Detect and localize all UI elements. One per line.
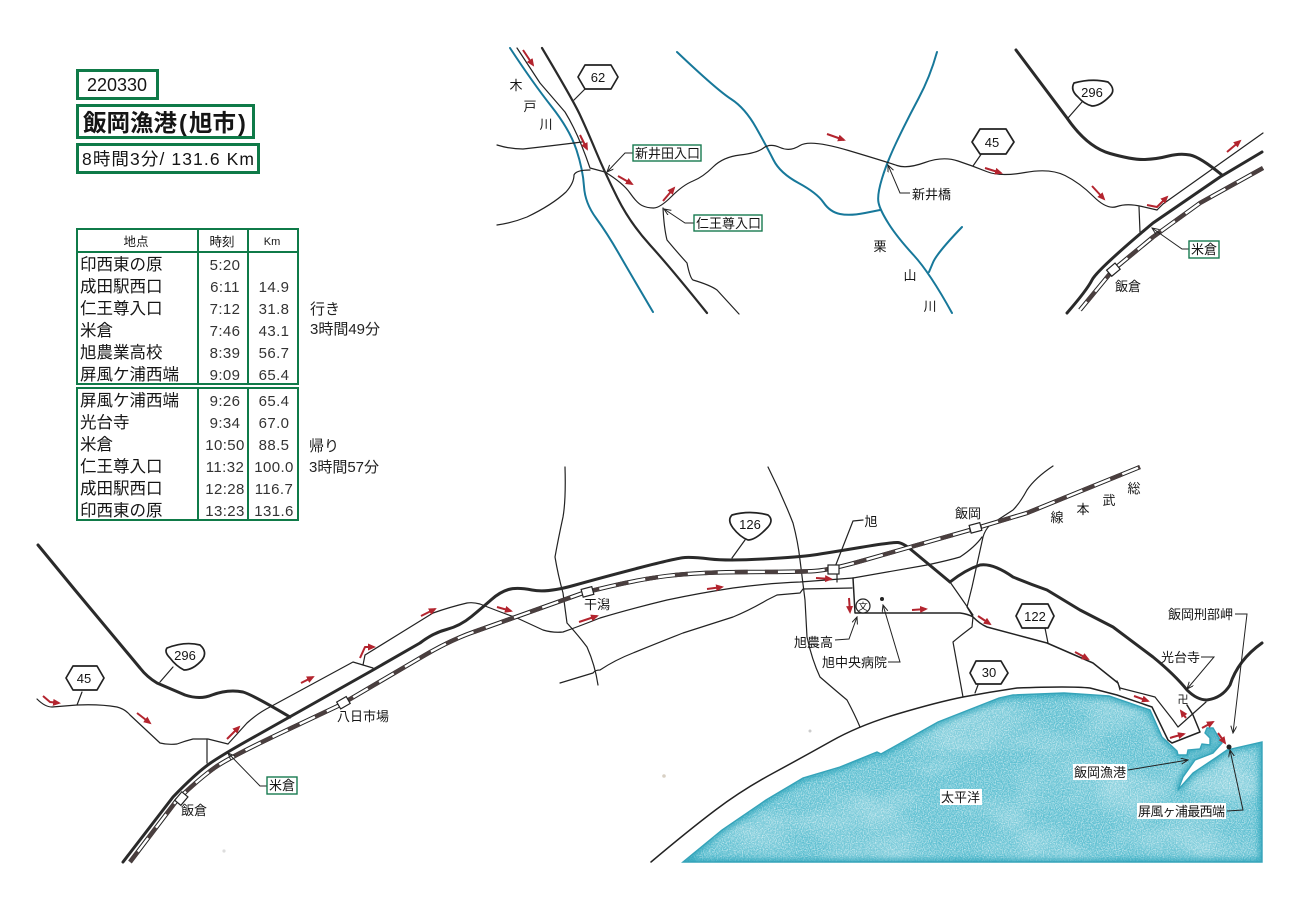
row: 屏風ケ浦西端 outbound: 9:09 (210, 367, 240, 384)
row: 米倉 outbound: 7:46 (210, 323, 240, 340)
route 296 road (1016, 50, 1222, 175)
row: 印西東の原 return: 13:23 (205, 503, 245, 520)
route 296 road (38, 545, 290, 717)
label: 飯岡刑部岬: 飯岡刑部岬 (1168, 607, 1233, 622)
panel: lower map (37, 466, 1262, 862)
road sign: 45: 45 (77, 671, 91, 686)
note: return duration (309, 437, 379, 476)
row: 成田駅西口 return (80, 479, 293, 498)
label: 総武本線 (1050, 481, 1141, 525)
heading: 飯岡漁港(旭市) (78, 106, 254, 138)
row: 仁王尊入口 outbound (80, 299, 289, 318)
note: return duration: 帰り (309, 437, 339, 455)
table header row: 時刻 (209, 235, 235, 249)
label: 新井橋: 新井橋 (912, 187, 951, 202)
row: 米倉 return (80, 435, 289, 454)
label: 総武本線: 総 (1127, 481, 1141, 496)
station: 飯倉 (175, 792, 207, 818)
row: 光台寺: 67.0 (259, 415, 289, 432)
label: 飯岡刑部岬 (1168, 607, 1247, 733)
label: 光台寺 (1161, 650, 1214, 689)
row: 成田駅西口 return: 116.7 (255, 481, 293, 498)
road sign: 30 (970, 661, 1008, 693)
row: 屏風ケ浦西端 outbound: 屏風ケ浦西端 (80, 365, 179, 384)
road sign: 122: 122 (1024, 609, 1046, 624)
row: 仁王尊入口 return: 仁王尊入口 (80, 457, 162, 476)
row: 屏風ケ浦西端 outbound: 65.4 (259, 367, 289, 384)
duration and distance box (78, 144, 258, 172)
row: 仁王尊入口 return (80, 457, 294, 476)
rivers (510, 48, 962, 313)
route arrows (43, 578, 1225, 743)
route arrows (523, 50, 1240, 207)
row: 印西東の原 outbound: 印西東の原 (80, 255, 162, 274)
row: 成田駅西口 return: 12:28 (205, 481, 245, 498)
label: 木戸川 (509, 78, 553, 132)
local roads (497, 48, 1263, 314)
note: outbound duration (310, 301, 380, 338)
panel: time table (77, 229, 380, 520)
label: 栗山川: 川 (923, 299, 937, 314)
note: return duration: 3時間57分 (309, 459, 379, 476)
icon: temple mark: 卍 (1178, 693, 1188, 706)
row: 米倉 outbound: 米倉 (80, 321, 113, 340)
label: 飯岡漁港: 飯岡漁港 (1074, 765, 1126, 780)
row: 仁王尊入口 return: 11:32 (206, 459, 244, 476)
road sign: 126 (730, 512, 771, 558)
road sign: 296: 296 (1081, 85, 1103, 100)
label: 栗山川: 栗 (873, 239, 887, 254)
row: 屏風ケ浦西端 outbound (80, 365, 289, 384)
railway (1080, 168, 1263, 310)
icon: school symbol 文 (856, 599, 870, 613)
road sign: 296 (1068, 80, 1113, 118)
road sign: 296 (160, 644, 205, 682)
row: 米倉 outbound: 43.1 (259, 323, 289, 340)
label: 栗山川: 山 (903, 268, 917, 283)
label: 新井田入口 (607, 145, 701, 172)
row: 屏風ケ浦西端 return (80, 391, 289, 410)
station: 八日市場: 八日市場 (337, 709, 389, 724)
label: 総武本線: 本 (1076, 502, 1090, 517)
row: 成田駅西口 outbound: 14.9 (259, 279, 289, 296)
label: 仁王尊入口: 仁王尊入口 (696, 216, 761, 231)
row: 光台寺: 9:34 (210, 415, 240, 432)
label: 木戸川: 木 (509, 78, 523, 93)
station: 飯岡: 飯岡 (955, 506, 981, 521)
road sign: 122 (1016, 604, 1054, 643)
row: 米倉 outbound (80, 321, 289, 340)
label: 新井橋 (888, 165, 951, 202)
station: 旭 (828, 514, 878, 574)
station: 八日市場 (337, 697, 389, 724)
Sobu main line railway (130, 467, 1140, 862)
row: 仁王尊入口 return: 100.0 (254, 459, 294, 476)
label: 米倉 (1152, 228, 1219, 258)
table header row: Km (264, 236, 280, 248)
heading: 飯岡漁港(旭市): ) (238, 110, 246, 136)
road sign: 126: 126 (739, 517, 761, 532)
table header row: 地点 (123, 235, 149, 249)
label: 木戸川: 戸 (523, 99, 537, 114)
row: 印西東の原 outbound: 5:20 (210, 257, 240, 274)
label: 総武本線: 武 (1102, 493, 1116, 508)
row: 旭農業高校 (80, 343, 289, 362)
route 62 road (542, 48, 707, 313)
label: 屏風ヶ浦最西端 (1137, 744, 1243, 819)
row: 屏風ケ浦西端 return: 9:26 (210, 393, 240, 410)
label: 仁王尊入口 (664, 209, 762, 231)
road sign: 45: 45 (985, 135, 999, 150)
date box (78, 70, 158, 98)
route 126 road (1067, 152, 1262, 313)
station: 飯倉: 飯倉 (181, 803, 207, 818)
label: 木戸川: 川 (539, 117, 553, 132)
heading: 飯岡漁港(旭市): ( (179, 110, 187, 136)
road sign: 45 (66, 666, 104, 705)
duration and distance box: 8時間3分/ 131.6 Km (82, 149, 254, 169)
row: 印西東の原 return: 131.6 (254, 503, 294, 520)
label: 旭中央病院 (822, 605, 900, 670)
row: 印西東の原 return (80, 501, 294, 520)
station: 干潟: 干潟 (584, 597, 610, 612)
label: 米倉 (228, 753, 297, 794)
row: 旭農業高校: 8:39 (210, 345, 240, 362)
row: 仁王尊入口 outbound: 仁王尊入口 (80, 299, 162, 318)
road sign: 45 (972, 129, 1014, 166)
row: 米倉 return: 10:50 (205, 437, 245, 454)
row: 旭農業高校: 旭農業高校 (80, 343, 162, 362)
label: 総武本線: 線 (1050, 510, 1064, 525)
row: 印西東の原 return: 印西東の原 (80, 501, 162, 520)
note: outbound duration: 行き (310, 301, 340, 318)
table header row (123, 235, 280, 249)
row: 旭農業高校: 56.7 (259, 345, 289, 362)
heading: 飯岡漁港(旭市): 飯岡漁港 (83, 110, 177, 136)
label: 米倉: 米倉 (269, 778, 295, 793)
panel: Pacific Ocean (670, 685, 1270, 865)
row: 印西東の原 outbound (80, 255, 240, 274)
row: 成田駅西口 outbound (80, 277, 289, 296)
road sign: 296: 296 (174, 648, 196, 663)
label: 太平洋: 太平洋 (941, 790, 980, 805)
station: 飯岡 (955, 506, 982, 533)
icon: hospital dot (880, 597, 884, 601)
panel: title block (78, 70, 258, 172)
row: 屏風ケ浦西端 return: 屏風ケ浦西端 (80, 391, 179, 410)
row: 成田駅西口 outbound: 6:11 (210, 279, 240, 296)
station: 干潟 (581, 587, 610, 612)
road sign: 30: 30 (982, 665, 996, 680)
label: 旭農高: 旭農高 (794, 635, 833, 650)
row: 成田駅西口 outbound: 成田駅西口 (80, 277, 162, 296)
label: 屏風ヶ浦最西端: 屏風ヶ浦最西端 (1138, 804, 1225, 819)
row: 屏風ケ浦西端 return: 65.4 (259, 393, 289, 410)
route 122 road (950, 565, 1262, 700)
date box: 220330 (87, 75, 147, 95)
row: 米倉 return: 88.5 (259, 437, 289, 454)
label: 新井田入口: 新井田入口 (635, 146, 700, 161)
panel: upper map (497, 48, 1263, 314)
route 126 road (123, 542, 950, 862)
icon: school symbol 文: 文 (858, 601, 868, 613)
note: outbound duration: 3時間49分 (310, 321, 380, 338)
row: 光台寺: 光台寺 (80, 413, 130, 432)
label: 光台寺: 光台寺 (1161, 650, 1200, 665)
label: 旭農高 (794, 617, 857, 650)
row: 成田駅西口 return: 成田駅西口 (80, 479, 162, 498)
row: 仁王尊入口 outbound: 31.8 (259, 301, 289, 318)
road sign: 62: 62 (591, 70, 605, 85)
row: 米倉 return: 米倉 (80, 435, 113, 454)
label: 米倉: 米倉 (1191, 242, 1217, 257)
row: 光台寺 (80, 413, 289, 432)
label: 栗山川 (873, 239, 937, 314)
row: 仁王尊入口 outbound: 7:12 (210, 301, 240, 318)
station: 旭: 旭 (864, 514, 878, 529)
label: 旭中央病院: 旭中央病院 (822, 655, 887, 670)
station: 飯倉: 飯倉 (1115, 279, 1141, 294)
road sign: 62 (574, 65, 618, 100)
table frame (77, 229, 298, 520)
heading: 飯岡漁港(旭市): 旭市 (189, 110, 236, 136)
label: 飯岡漁港 (1073, 760, 1188, 780)
station: 飯倉 (1107, 263, 1141, 294)
local roads (37, 466, 1206, 862)
